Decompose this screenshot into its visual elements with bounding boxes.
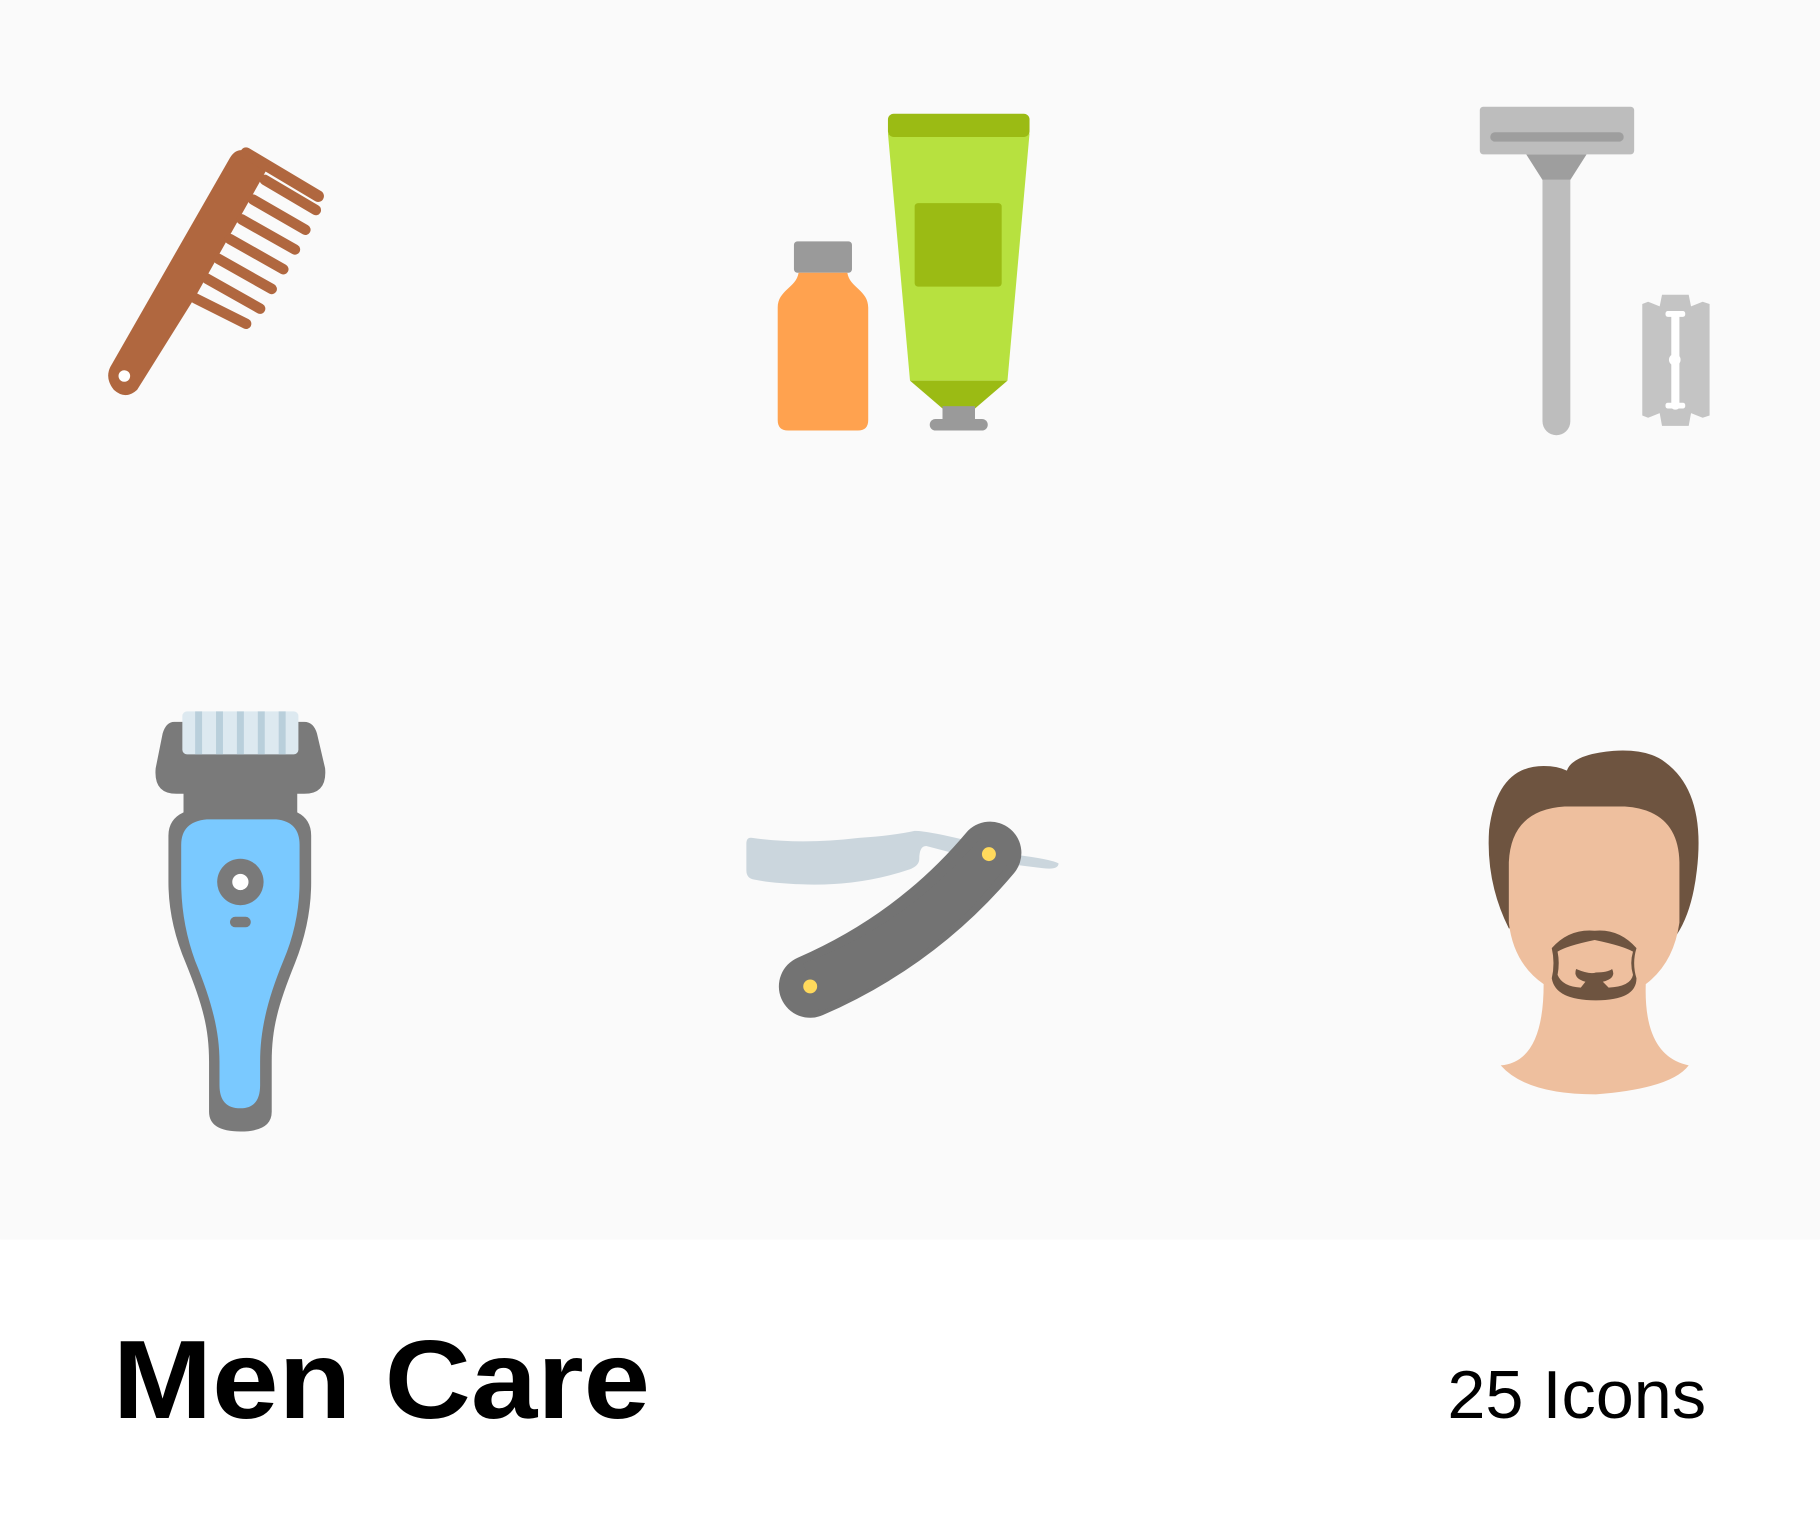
title: Men Care xyxy=(113,1317,650,1442)
icon: straight razor xyxy=(746,831,1059,1012)
icon: man with goatee xyxy=(1489,751,1699,1094)
icon: safety razor and blade xyxy=(1480,107,1710,435)
icon: hair trimmer xyxy=(155,711,325,1131)
icon: lotion bottle and tube xyxy=(778,114,1030,431)
icon: comb xyxy=(108,150,318,395)
icon count: 25 Icons xyxy=(1447,1358,1706,1433)
